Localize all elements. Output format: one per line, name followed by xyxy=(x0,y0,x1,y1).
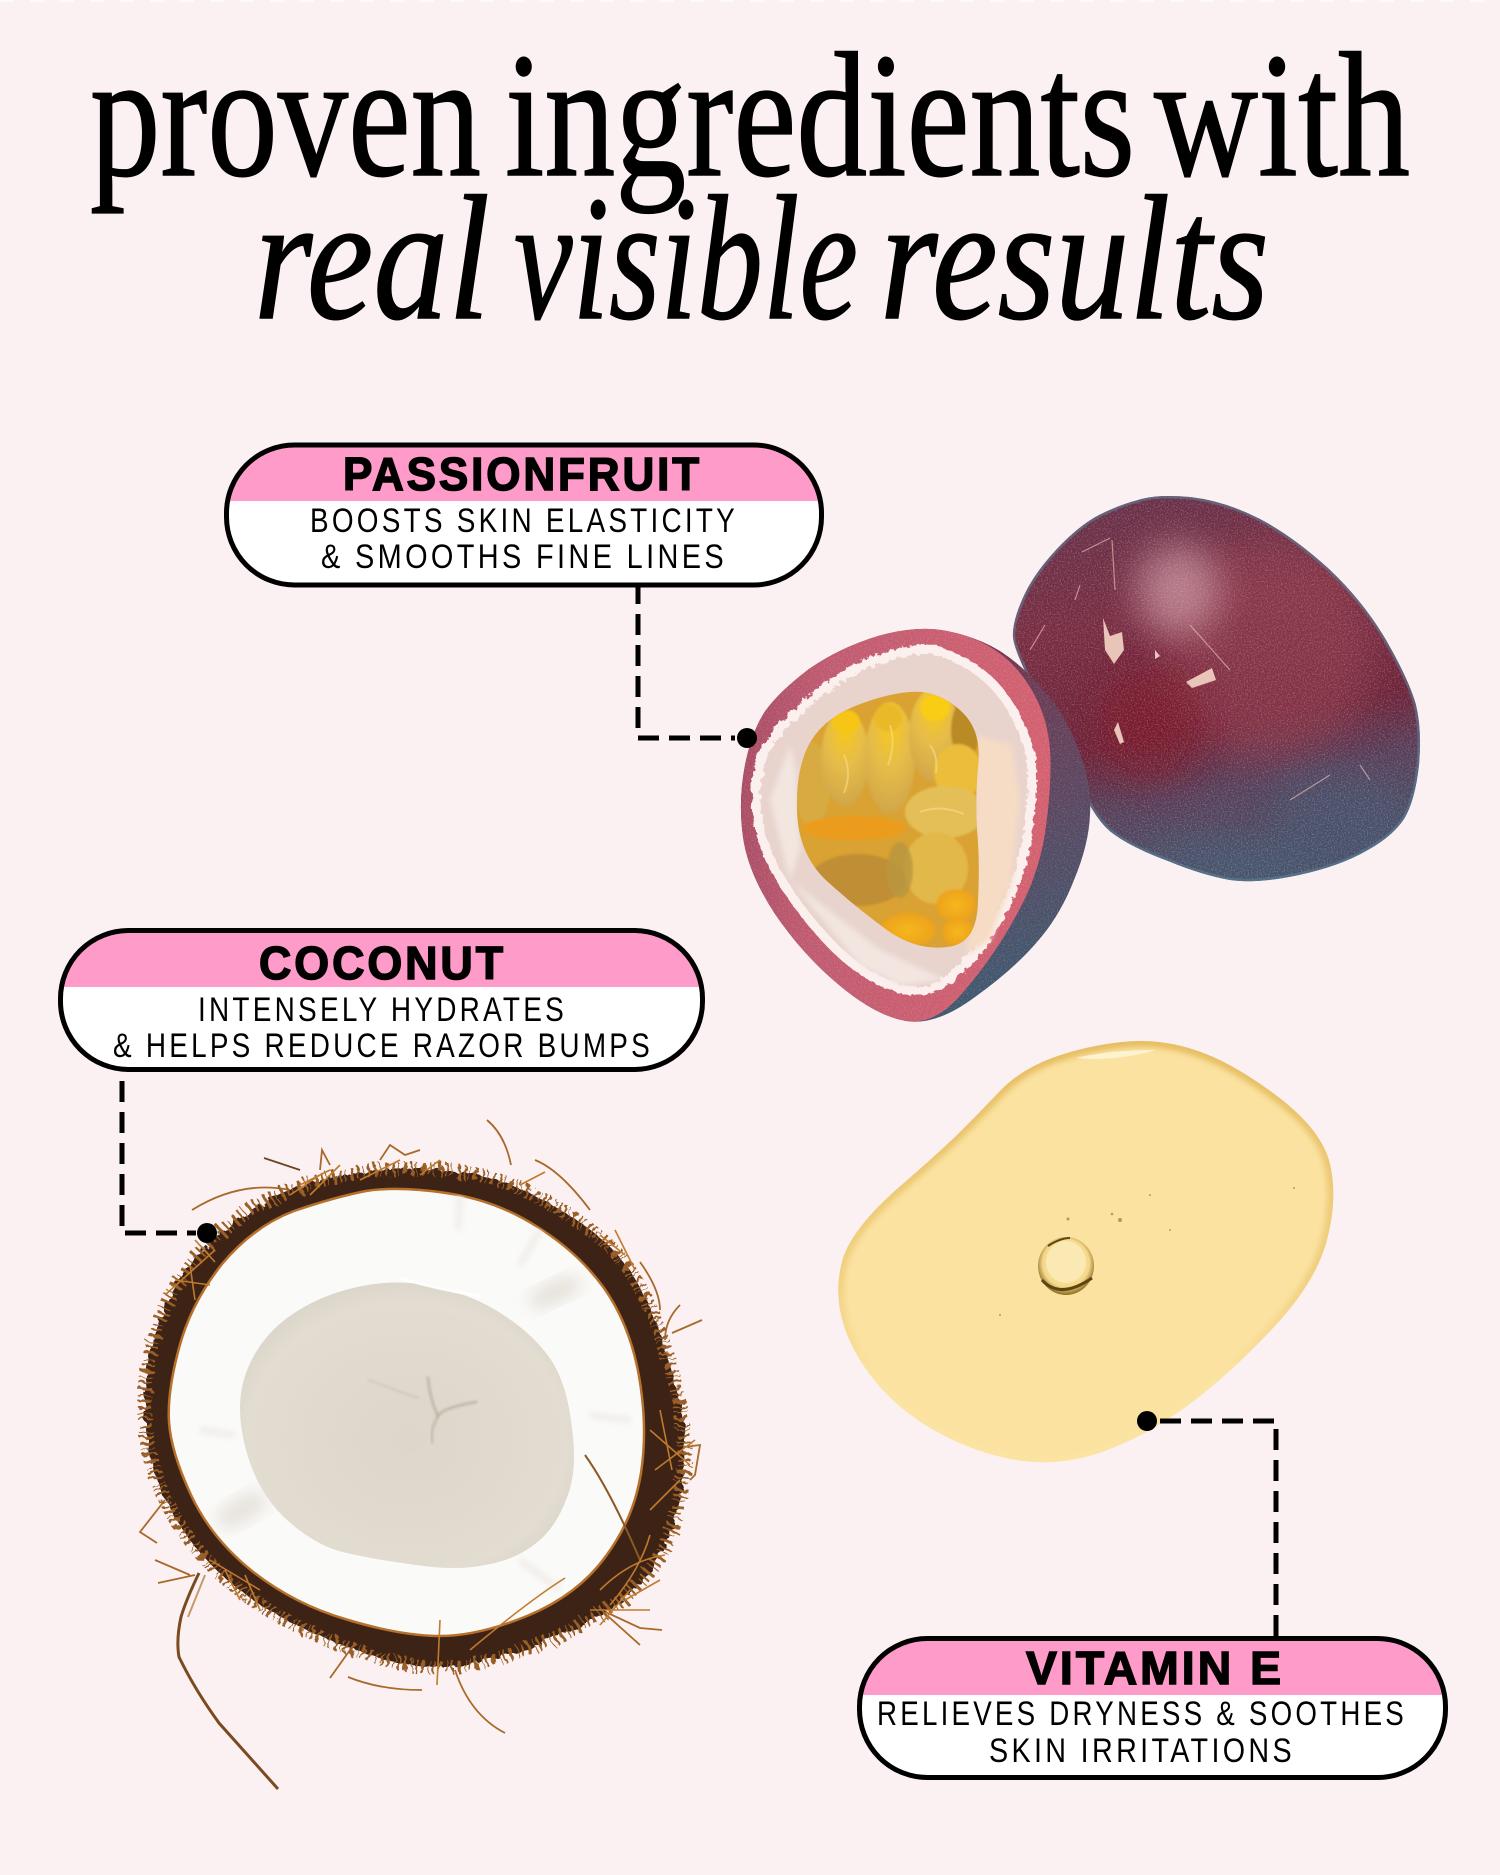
callout: passionfruit: & SMOOTHS FINE LINES xyxy=(321,538,727,576)
cut face rim xyxy=(741,629,1050,1022)
callout: passionfruit xyxy=(220,440,830,585)
callout: passionfruit: PASSIONFRUIT xyxy=(343,448,702,500)
oil bubble xyxy=(1038,1237,1094,1295)
image: whole passionfruit xyxy=(1012,496,1420,882)
title: ingredients xyxy=(505,16,1135,214)
title: with xyxy=(1154,16,1410,214)
callout: coconut: INTENSELY HYDRATES xyxy=(198,991,567,1029)
skin of the halved fruit xyxy=(741,629,1090,1022)
coconut fibers over shell xyxy=(165,1160,695,1685)
image: vitamin E oil drop xyxy=(838,1041,1333,1462)
title: visible xyxy=(514,159,858,357)
callout: coconut xyxy=(55,925,710,1070)
pulp xyxy=(797,692,979,948)
coconut white flesh xyxy=(169,1189,644,1636)
callout: passionfruit: BOOSTS SKIN ELASTICITY xyxy=(310,502,738,540)
connector: coconut xyxy=(122,1081,217,1243)
title: results xyxy=(880,159,1269,357)
coconut cream center xyxy=(240,1282,574,1568)
coconut stray fibers xyxy=(140,1120,702,1789)
image: halved passionfruit xyxy=(730,620,1100,1030)
callout: coconut: COCONUT xyxy=(259,937,506,989)
image: coconut half xyxy=(140,1120,702,1789)
callout: vitamin E: SKIN IRRITATIONS xyxy=(989,1732,1295,1770)
coconut husk fringe xyxy=(144,1168,684,1667)
callout: coconut: & HELPS REDUCE RAZOR BUMPS xyxy=(113,1027,653,1065)
callout: vitamin E: VITAMIN E xyxy=(1026,1642,1284,1694)
title: real xyxy=(254,159,490,357)
title xyxy=(90,16,1410,357)
pale flesh patch xyxy=(966,735,1020,955)
white membrane xyxy=(756,649,1032,991)
connector: vitamin E xyxy=(1137,1411,1276,1636)
callout: vitamin E xyxy=(855,1634,1450,1778)
title: proven xyxy=(90,16,481,214)
connector: passionfruit xyxy=(638,587,757,748)
